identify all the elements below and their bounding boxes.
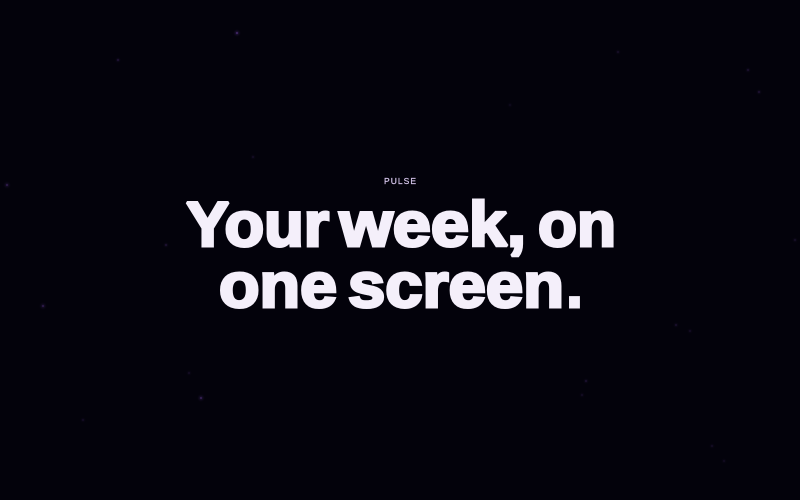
- headline line 1: on: [538, 190, 616, 260]
- headline: [186, 190, 616, 321]
- headline line 2: one: [219, 251, 337, 321]
- headline line 2: screen: [348, 251, 564, 321]
- headline line 1: [186, 190, 616, 260]
- headline line 1: Your: [186, 190, 329, 260]
- headline line 2: .: [566, 251, 582, 321]
- headline line 1: week,: [338, 190, 526, 260]
- eyebrow label: PULSE: [384, 176, 416, 186]
- headline line 2: [219, 251, 582, 321]
